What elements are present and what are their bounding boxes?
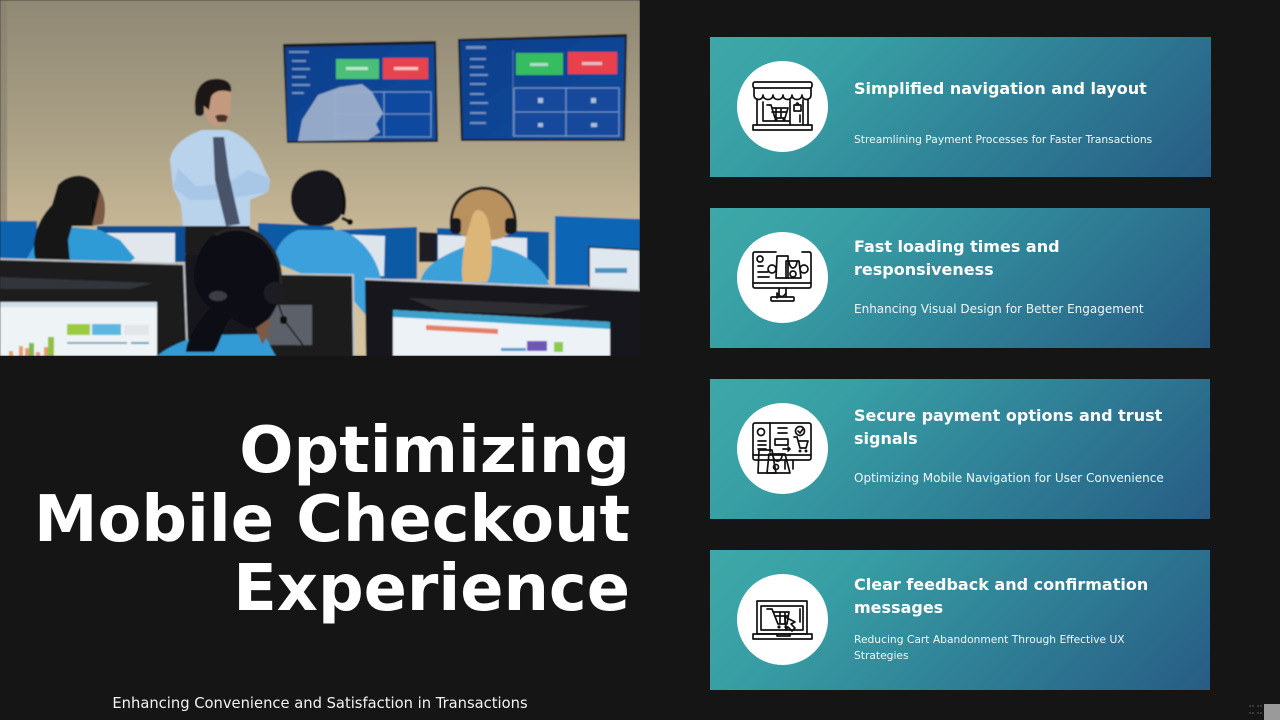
description: Reducing Cart Abandonment Through Effective UX [854,633,1125,646]
description [854,633,1125,662]
panel: fast loading [710,208,1210,348]
title: Experience [233,552,630,626]
heading: responsiveness [854,260,994,279]
panel: secure payment [710,379,1210,519]
heading: Clear feedback and confirmation [854,575,1148,594]
seated woman foreground [157,226,303,356]
icon: storefront with cart [737,61,828,152]
description: Optimizing Mobile Navigation for User Convenience [854,471,1164,485]
heading [854,406,1162,448]
description: Streamlining Payment Processes for Faster Transactions [854,133,1152,146]
heading [854,575,1148,617]
heading: Secure payment options and trust [854,406,1162,425]
corner marker [1264,704,1280,720]
panel: simplified navigation [710,37,1211,177]
heading: messages [854,598,943,617]
photo: call center training room [0,0,640,356]
seated woman with blonde ponytail [420,188,549,285]
panel: clear feedback [710,550,1210,690]
icon: monitor with shopping bags [737,232,828,323]
wall monitors [283,34,627,143]
corner dot pattern [1249,705,1262,714]
icon: laptop with cart and cursor [737,574,828,665]
seated man center [274,170,384,320]
icon: checkout screen with bags [737,403,828,494]
heading: Fast loading times and [854,237,1060,256]
foreground monitors [0,255,640,356]
blue monitor backs [0,216,640,290]
heading: signals [854,429,918,448]
subtitle: Enhancing Convenience and Satisfaction in Transactions [112,695,528,712]
description: Enhancing Visual Design for Better Engagement [854,302,1144,316]
title: Mobile Checkout [34,483,630,557]
title: Optimizing [239,414,630,488]
heading [854,237,1060,279]
seated woman left [25,176,135,262]
title [34,414,630,626]
description: Strategies [854,648,909,662]
heading: Simplified navigation and layout [854,79,1147,98]
standing presenter [170,79,270,265]
